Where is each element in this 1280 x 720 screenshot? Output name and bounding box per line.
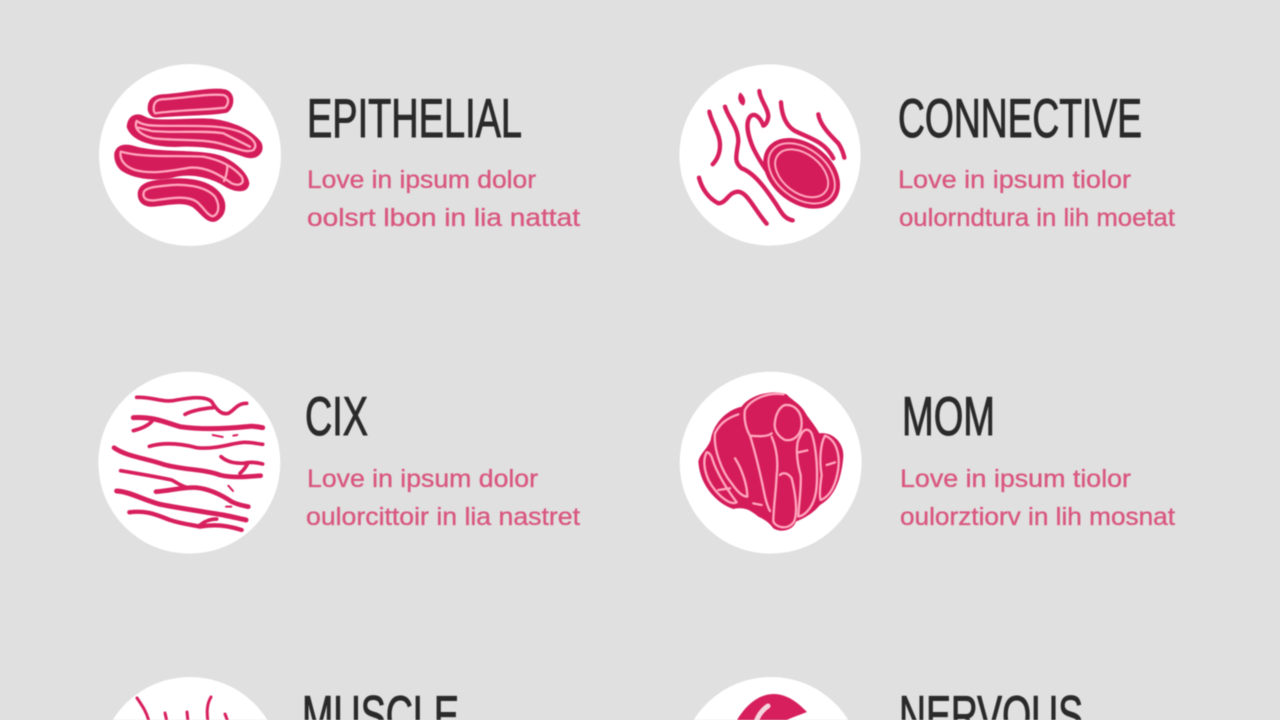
icon: muscle bundle	[680, 372, 862, 554]
description: cix	[306, 465, 580, 531]
icon: muscle fibres	[99, 677, 281, 720]
description: mom	[900, 465, 1175, 531]
icon: nerve cell	[680, 677, 862, 720]
description: cix: Love in ipsum dolor	[307, 465, 538, 493]
description: cix: oulorcittoir in lia nastret	[306, 503, 580, 531]
description: mom: Love in ipsum tiolor	[900, 465, 1131, 493]
description: epithelial: oolsrt lbon in lia nattat	[307, 204, 580, 232]
description: epithelial: Love in ipsum dolor	[307, 166, 536, 194]
heading: epithelial: EPITHELIAL	[307, 87, 522, 149]
icon: fibres	[98, 372, 280, 554]
description: mom: oulorztiorv in lih mosnat	[900, 503, 1175, 531]
icon: connective tissue	[679, 64, 861, 246]
description: epithelial	[307, 166, 580, 232]
heading: cix: CIX	[305, 385, 368, 447]
panel: connective	[679, 64, 1175, 246]
heading: mom: MOM	[902, 385, 995, 447]
panel: cix	[98, 372, 580, 554]
description: connective: oulorndtura in lih moetat	[899, 204, 1175, 232]
panel: nervous	[680, 677, 1083, 720]
panel: mom	[680, 372, 1175, 554]
description: connective: Love in ipsum tiolor	[898, 166, 1131, 194]
description: connective	[898, 166, 1175, 232]
icon: epithelial cells	[99, 64, 281, 246]
heading: connective: CONNECTIVE	[898, 87, 1142, 149]
panel: muscle	[99, 677, 459, 720]
panel: epithelial	[99, 64, 580, 246]
